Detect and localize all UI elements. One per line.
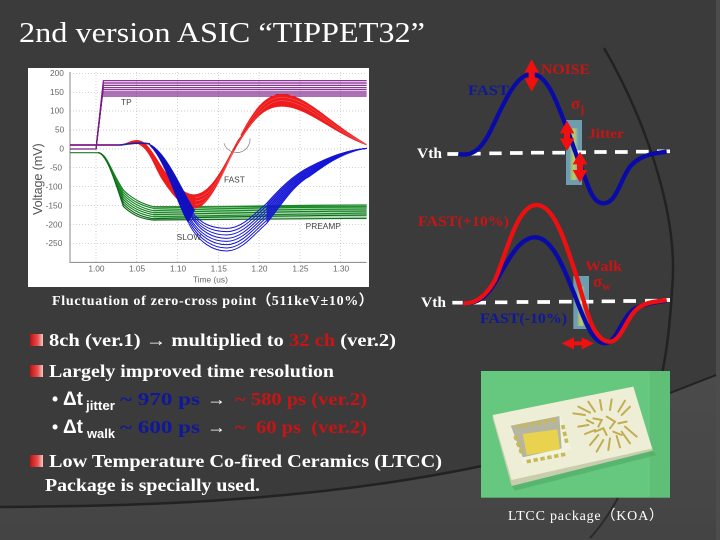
chart axis labels: -150	[46, 200, 63, 210]
chart axis labels: Time (us)	[193, 275, 228, 285]
title: 2nd version ASIC “TIPPET32”	[19, 18, 425, 49]
chart axis labels: 1.15	[211, 264, 227, 274]
chart: zero-cross waveform simulation	[28, 68, 369, 287]
item: walk: →	[207, 417, 226, 437]
walk window box	[573, 276, 589, 329]
chart axis labels: 1.10	[170, 264, 187, 274]
series: TP purple	[70, 81, 367, 149]
series: PREAMP green	[70, 153, 367, 220]
item: walk: Δt	[63, 417, 84, 438]
item: jitter: →	[207, 389, 226, 409]
item: jitter	[52, 389, 367, 413]
chart axis labels: -250	[46, 238, 63, 248]
chart axis labels: 50	[55, 125, 65, 135]
arrow: walk	[562, 337, 594, 349]
item: jitter: •	[52, 389, 58, 409]
chart axis labels: -200	[46, 219, 63, 229]
item: time resolution: Largely improved time resolution	[49, 361, 334, 381]
photo caption: LTCC package（KOA）	[508, 508, 663, 524]
photo: LTCC package	[481, 371, 670, 498]
label: Jitter: Jitter	[588, 126, 624, 141]
series: SLOW blue	[120, 143, 367, 251]
item: LTCC: Low Temperature Co-fired Ceramics (LTCC)	[49, 451, 442, 471]
label: NOISE: NOISE	[541, 62, 590, 78]
chart axis labels: SLOW	[177, 232, 201, 242]
item: walk	[52, 417, 367, 441]
chart axis labels: 1.00	[88, 264, 105, 274]
chart axis labels: 1.05	[129, 264, 146, 274]
item: walk: walk	[86, 426, 116, 441]
item: jitter: Δt	[63, 389, 84, 410]
label: sigma j: j	[579, 102, 584, 116]
label: FAST +10%: FAST(+10%)	[418, 214, 509, 230]
item: jitter: jitter	[85, 398, 115, 413]
series: FAST red	[120, 94, 367, 208]
chart axis labels: 1.25	[292, 264, 309, 274]
label: Walk: Walk	[585, 259, 623, 275]
chart axis labels: FAST	[224, 175, 245, 185]
label: sigma j: σ	[571, 94, 580, 113]
item: walk: ~ 60 ps (ver.2)	[235, 417, 367, 437]
label: Vth: Vth	[421, 295, 446, 311]
item: walk: •	[52, 417, 58, 437]
chart caption: Fluctuation of zero-cross point（511keV±10%）	[52, 293, 373, 309]
bullet list	[30, 330, 442, 495]
chart axis labels: PREAMP	[306, 221, 341, 231]
chart axis labels: -100	[46, 181, 63, 191]
label: sigma w: w	[602, 279, 611, 293]
item: jitter: ~ 970 ps	[120, 389, 200, 409]
chart axis labels: Voltage (mV)	[31, 143, 45, 215]
zero-cross marker circle	[224, 138, 250, 153]
chart axis labels: -50	[50, 162, 62, 172]
label: FAST -10%: FAST(-10%)	[480, 311, 567, 327]
jitter window box	[566, 120, 582, 185]
label: Vth: Vth	[417, 146, 442, 162]
item: jitter: ~ 580 ps (ver.2)	[235, 389, 367, 409]
chart axis labels: 1.30	[333, 264, 350, 274]
chart axis labels: 0	[59, 144, 64, 154]
arrow: jitter upper	[560, 121, 574, 151]
chart axis labels: TP	[121, 97, 132, 107]
chart axis labels: 1.20	[251, 264, 268, 274]
arrow: jitter lower	[573, 152, 587, 183]
label: sigma w: σ	[593, 272, 602, 291]
label: FAST: FAST	[468, 83, 509, 99]
item: package: Package is specially used.	[45, 475, 260, 495]
diagram: jitter	[417, 59, 670, 203]
item: channels: 8ch (ver.1) → multiplied to 32 ch (ver.2)	[49, 330, 396, 350]
chart axis labels: 100	[50, 106, 64, 116]
arrow: noise	[524, 59, 539, 92]
item: walk: ~ 600 ps	[120, 417, 200, 437]
chart axis labels: 150	[50, 87, 64, 97]
diagram: walk	[418, 205, 670, 349]
bullet icons	[30, 334, 43, 467]
chart axis labels	[31, 68, 350, 285]
chart axis labels: 200	[50, 68, 64, 78]
